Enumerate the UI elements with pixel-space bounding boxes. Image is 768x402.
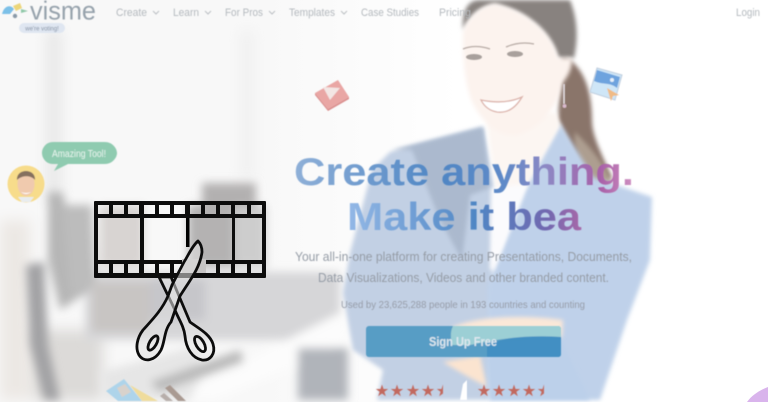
- callout: Amazing Tool: [42, 142, 117, 171]
- jacket left: [343, 127, 495, 400]
- jacket right: [487, 123, 652, 400]
- icon: document cards bottom: [106, 379, 186, 401]
- eyes: [466, 54, 482, 60]
- nav links: Create: [116, 7, 147, 19]
- subheading text: Data Visualizations, Videos and other branded content.: [318, 270, 609, 285]
- icon: video play card: [315, 80, 349, 111]
- face: [463, 4, 572, 135]
- logo: visme: [2, 0, 96, 33]
- blade: right-leaning with handle: [137, 241, 202, 360]
- nav links: Pricing: [439, 7, 471, 19]
- woman portrait: [343, 0, 652, 400]
- subheading text: Your all-in-one platform for creating Presentations, Documents,: [295, 249, 632, 264]
- nav links: Login: [736, 7, 760, 19]
- film cut line: [186, 218, 190, 247]
- eyebrows: [463, 43, 534, 49]
- heading: Make it bea: [347, 196, 581, 239]
- decorative purple corner shape: [747, 387, 768, 402]
- logo mark: [2, 3, 28, 18]
- star ratings: [376, 384, 544, 396]
- braid: [575, 132, 612, 196]
- neck and shirt: [487, 112, 560, 190]
- nav links: Learn: [173, 7, 199, 19]
- hair: [463, 0, 577, 58]
- callout: Amazing Tool: Amazing Tool!: [52, 148, 106, 160]
- button: Sign Up Free: Sign Up Free: [429, 334, 497, 349]
- nav links: Templates: [289, 7, 335, 19]
- button: Sign Up Free: [366, 326, 561, 357]
- heading: [294, 151, 634, 239]
- nav links: [116, 7, 760, 19]
- heading: Create anything.: [294, 151, 634, 194]
- blade: left-leaning with handle: [159, 277, 214, 360]
- film strip: [94, 201, 266, 278]
- film cut gap: [182, 259, 206, 273]
- earring: [563, 84, 565, 104]
- finger hole left: [146, 334, 160, 352]
- nav links: Case Studies: [361, 7, 419, 19]
- avatar: smiling man: [8, 166, 44, 202]
- nav links: For Pros: [225, 7, 263, 19]
- logo badge: we're voting!: [24, 26, 59, 32]
- crossed arms and hand: [452, 317, 563, 345]
- smile: [481, 97, 522, 112]
- ponytail: [558, 56, 612, 182]
- finger hole right: [192, 335, 208, 353]
- subheading text: [295, 249, 632, 285]
- icon: film strip and scissors: [94, 201, 266, 360]
- top navigation: [2, 0, 760, 33]
- icon: image card with cursor: [590, 68, 622, 101]
- usage statistic: Used by 23,625,288 people in 193 countries and counting: [341, 299, 585, 311]
- scissors: [137, 241, 214, 360]
